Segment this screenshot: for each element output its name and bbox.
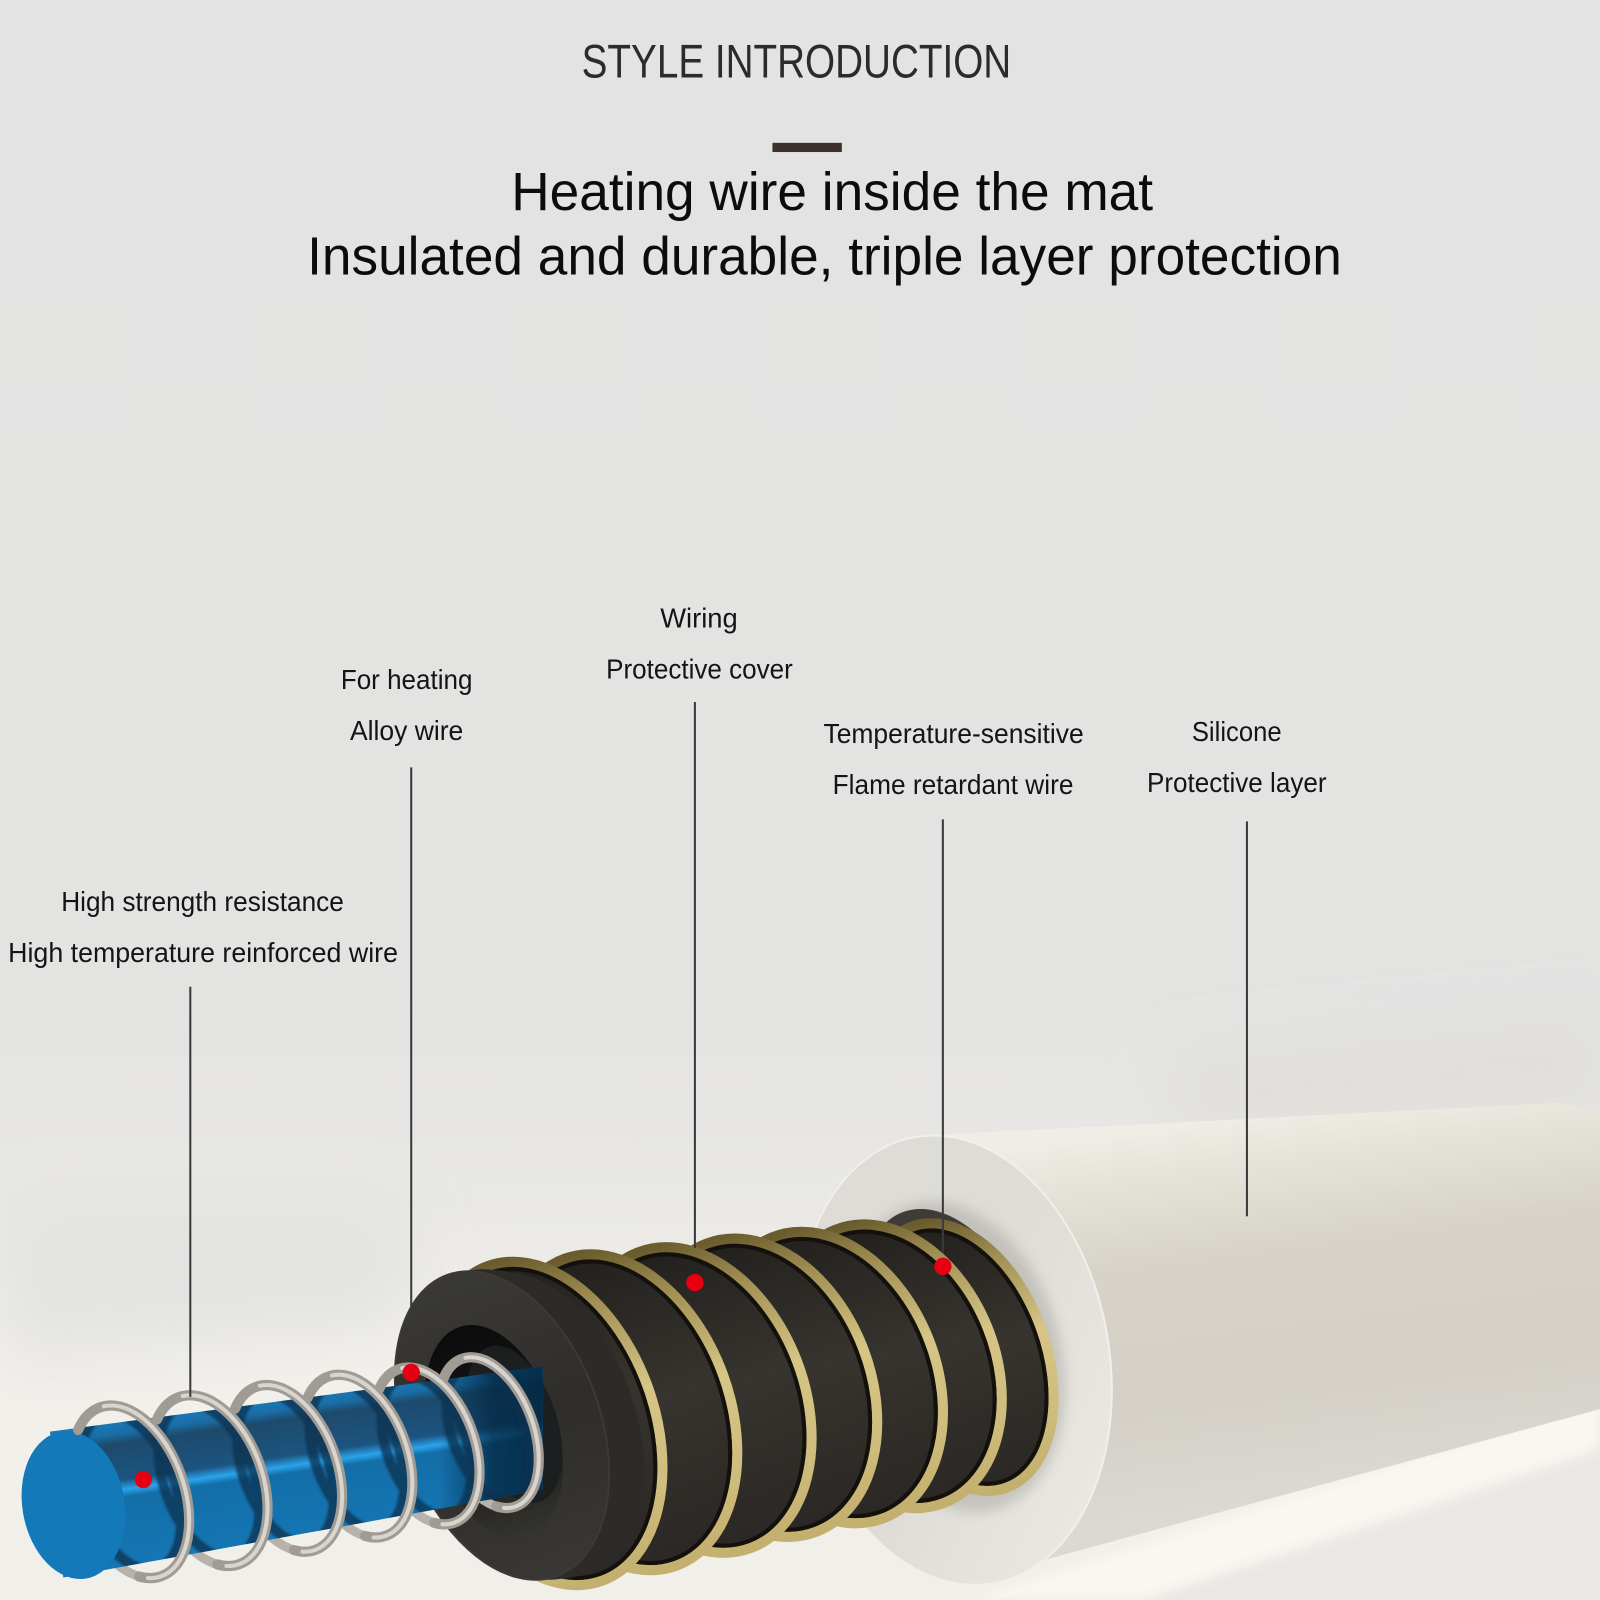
marker dot: flame retardant wire: [934, 1258, 952, 1275]
leader line: protective cover: [694, 702, 696, 1248]
leader line: alloy wire: [410, 767, 412, 1318]
leader line: flame retardant wire: [942, 819, 944, 1253]
coils front: [50, 1343, 558, 1594]
silicone protective layer cylinder: [762, 1103, 1600, 1600]
front sleeve: [366, 1239, 684, 1600]
heading: [307, 162, 1342, 286]
marker dot: protective cover: [686, 1274, 704, 1291]
label: flame retardant wire: Temperature-sensitive: [823, 718, 1084, 749]
black flame retardant core with gold wire: [355, 1183, 1088, 1600]
gold ring 3: [673, 1197, 984, 1558]
gold ring 5: [536, 1213, 854, 1587]
hole: [400, 1307, 588, 1556]
label: reinforced wire: [8, 886, 398, 968]
leader line: reinforced wire: [189, 987, 191, 1397]
coil highlights: [50, 1343, 558, 1594]
label: flame retardant wire: Flame retardant wire: [833, 769, 1073, 800]
shadow on disc: [810, 1177, 1099, 1538]
blue core rod with silver resistance coils: [22, 1352, 544, 1584]
label: silicone layer: Silicone: [1192, 716, 1282, 747]
title divider bar: [772, 143, 842, 152]
coils back: [50, 1343, 558, 1594]
leader line: silicone layer: [1246, 821, 1248, 1216]
label: protective cover: Wiring: [660, 603, 738, 634]
title: STYLE INTRODUCTION: [582, 36, 1011, 88]
label: protective cover: [606, 603, 793, 685]
label: alloy wire: Alloy wire: [350, 715, 463, 746]
heading: Insulated and durable, triple layer protection: [307, 226, 1342, 286]
gold ring 6: [462, 1221, 779, 1600]
rod body: [50, 1366, 543, 1578]
label: alloy wire: [341, 664, 472, 746]
label: reinforced wire: High temperature reinforced wire: [8, 937, 398, 968]
label: silicone layer: [1147, 716, 1327, 798]
label: reinforced wire: High strength resistance: [61, 886, 344, 917]
front face: [355, 1241, 649, 1600]
gold ring 7: [385, 1229, 705, 1600]
label: flame retardant wire: [823, 718, 1084, 800]
gold ring 2: [737, 1191, 1042, 1542]
label: silicone layer: Protective layer: [1147, 767, 1327, 798]
rod end cap: [10, 1423, 137, 1587]
marker dot: alloy wire: [403, 1364, 420, 1381]
label: protective cover: Protective cover: [606, 654, 793, 685]
label: alloy wire: For heating: [341, 664, 472, 695]
gold ring 4: [604, 1205, 918, 1571]
dark end cap: [823, 1183, 1086, 1521]
heading: Heating wire inside the mat: [511, 162, 1153, 222]
silicone end disc: [762, 1110, 1146, 1600]
gold ring 1: [830, 1197, 1088, 1517]
marker dot: reinforced wire: [135, 1471, 152, 1488]
